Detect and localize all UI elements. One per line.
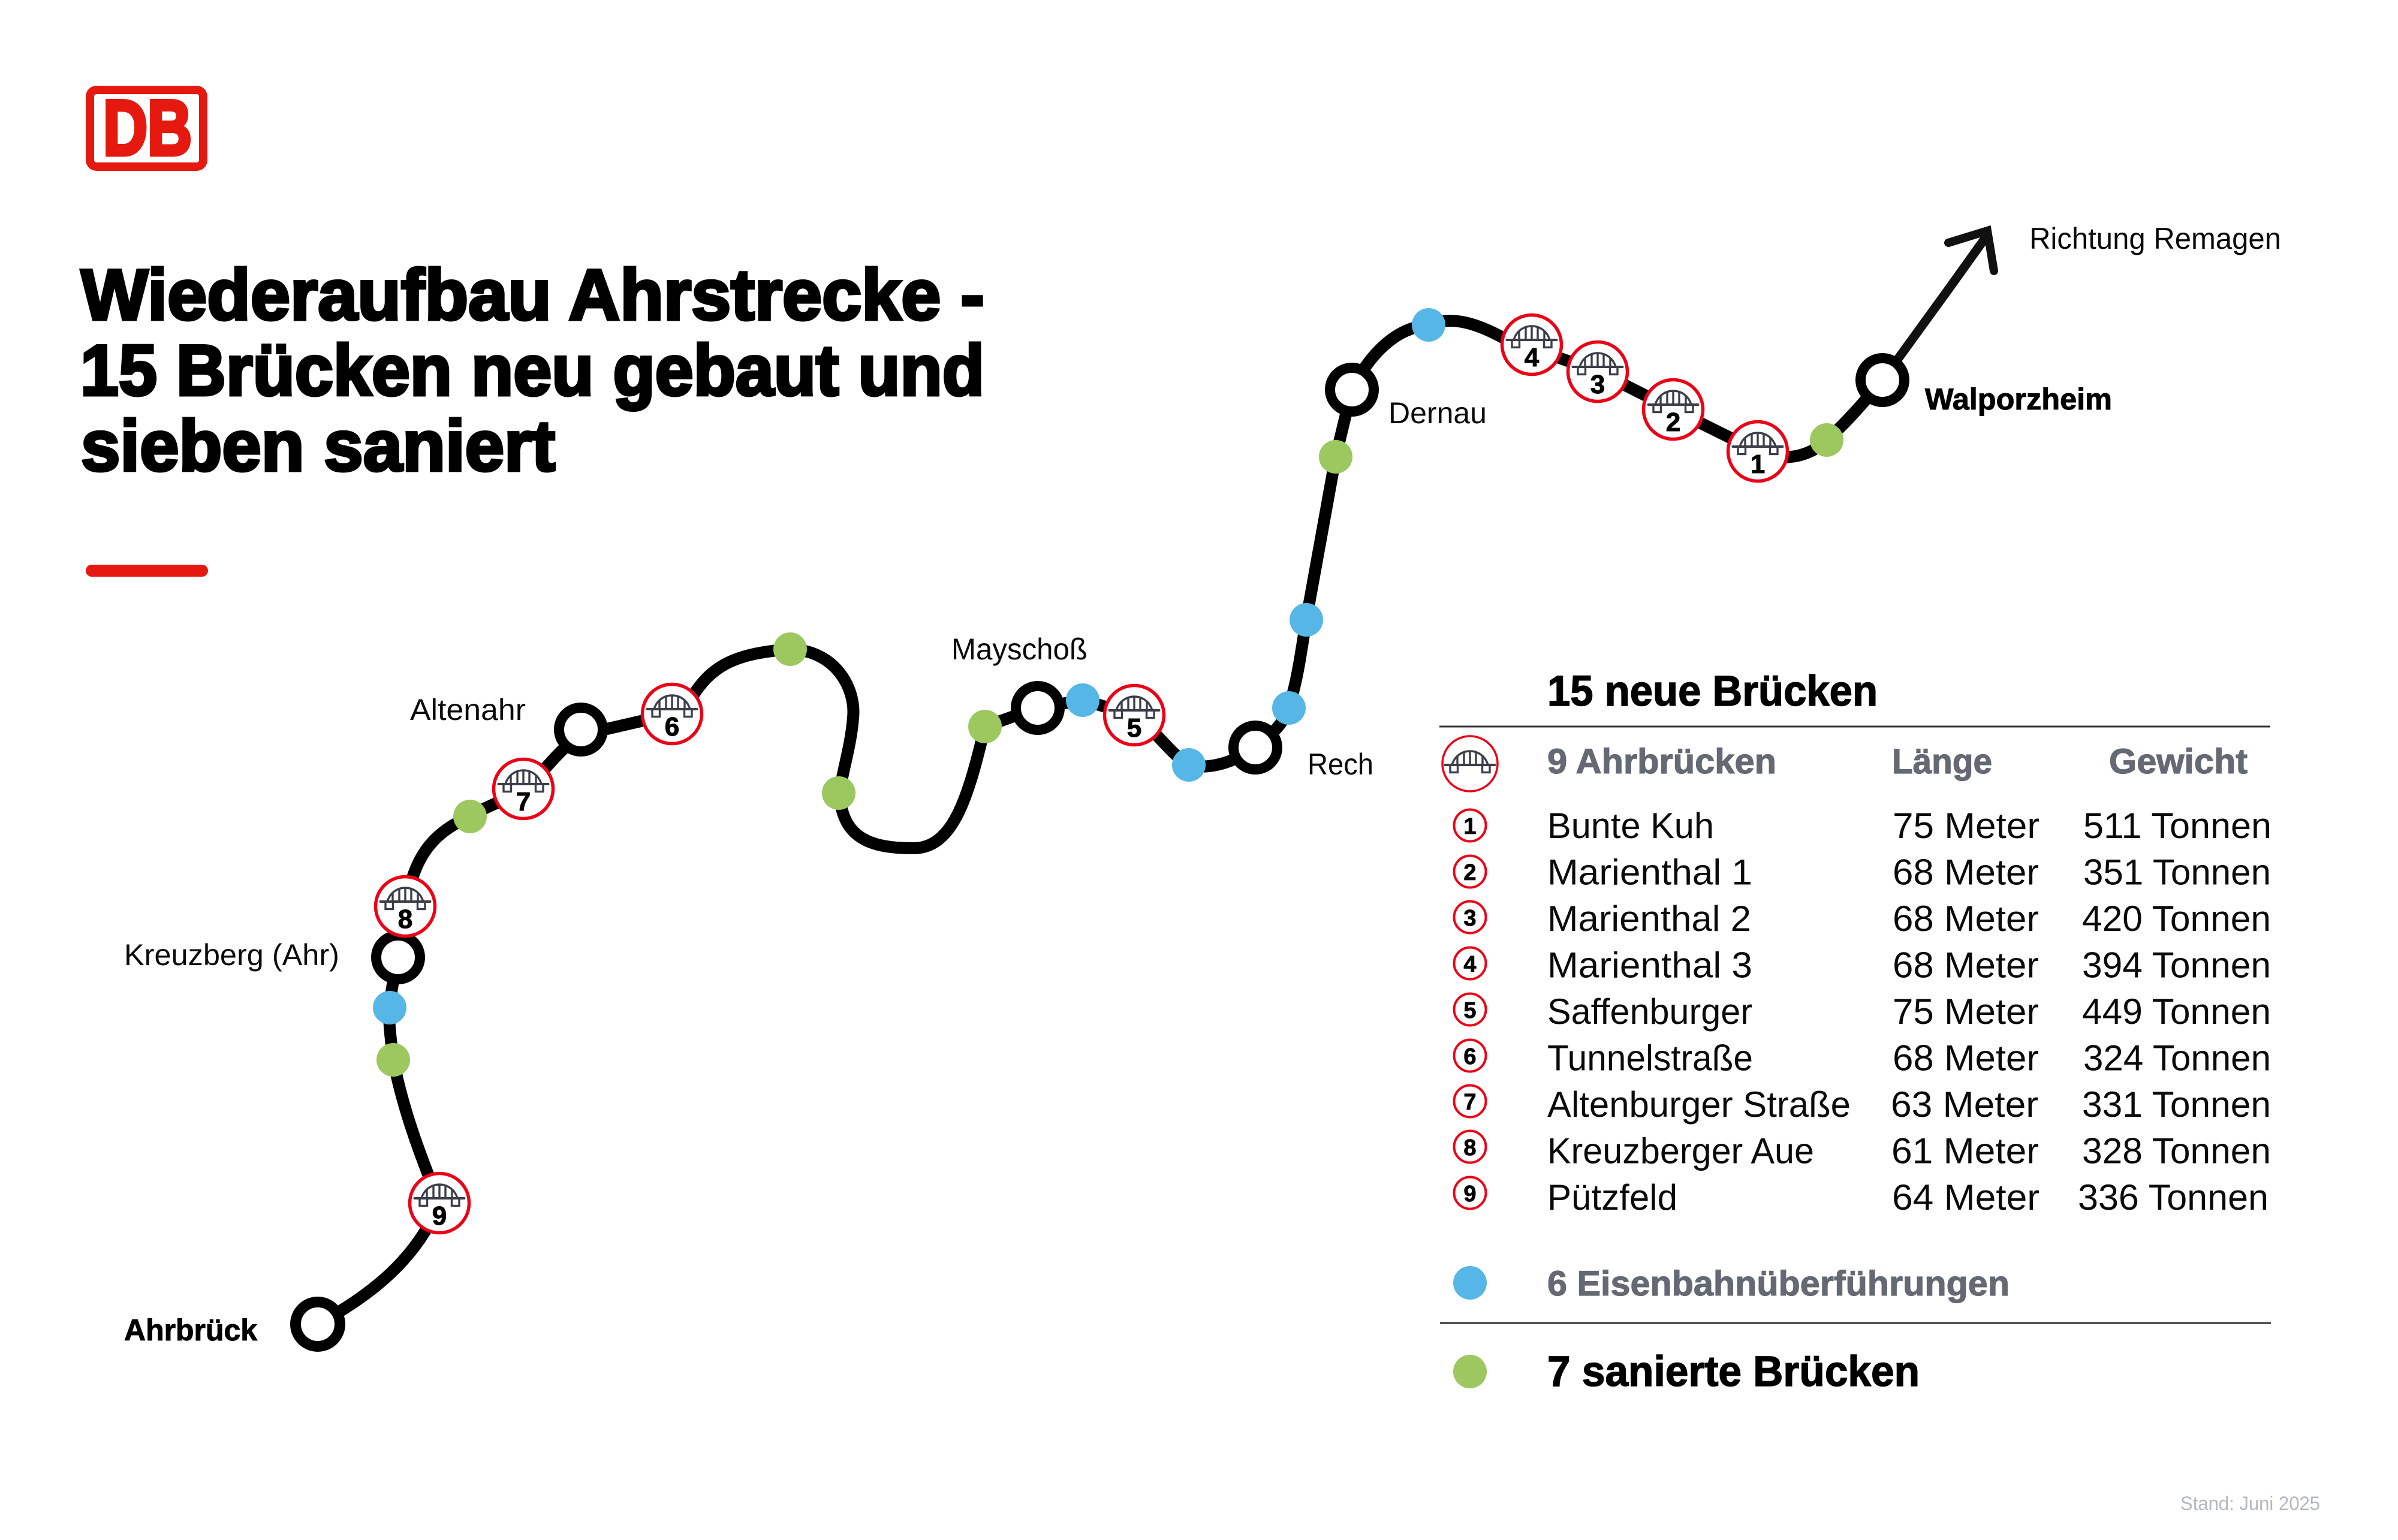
route map — [124, 222, 2281, 1347]
row 2: 2 — [1463, 860, 1477, 885]
arrow: Richtung Remagen — [1882, 231, 1994, 380]
row 5: 75 Meter — [1893, 991, 2039, 1032]
row 2 — [1454, 852, 2271, 892]
row 2: Marienthal 1 — [1547, 852, 1752, 892]
bridge marker 1 — [1728, 422, 1788, 481]
bridge marker 3: 3 — [1590, 370, 1605, 399]
label: Altenahr: Altenahr — [410, 693, 526, 727]
bridge marker 8 — [375, 876, 435, 936]
row 1: 1 — [1463, 814, 1477, 839]
row 7: 63 Meter — [1891, 1084, 2038, 1125]
bridge marker 2 — [1644, 380, 1703, 439]
row 6: 324 Tonnen — [2083, 1038, 2271, 1078]
bridge marker 5: 5 — [1127, 713, 1141, 743]
railway track line — [318, 321, 1882, 1324]
row 7 — [1454, 1084, 2271, 1125]
bridge marker 4 — [1502, 315, 1561, 374]
legend table — [1439, 668, 2272, 1396]
row 8 — [1454, 1131, 2271, 1171]
icon: DB logo: DB — [103, 84, 192, 171]
row 1: Bunte Kuh — [1547, 806, 1714, 846]
row 2: 68 Meter — [1893, 852, 2039, 892]
row 9: 336 Tonnen — [2078, 1177, 2269, 1217]
bridge marker 7 — [494, 759, 553, 819]
legend text: 7 sanierte Brücken: 7 sanierte Brücken — [1547, 1348, 1920, 1396]
station: Mayschoß — [1016, 686, 1060, 730]
bridge marker 4: 4 — [1525, 343, 1540, 372]
label: Ahrbrück: Ahrbrück — [124, 1313, 257, 1347]
row 6 — [1454, 1038, 2271, 1078]
bridge marker 5 — [1104, 686, 1164, 745]
bridge marker 9: 9 — [432, 1201, 447, 1231]
bridge marker 1: 1 — [1751, 450, 1765, 479]
row 9: Pützfeld — [1547, 1177, 1677, 1217]
bridge marker 8: 8 — [398, 905, 412, 934]
row 2: 351 Tonnen — [2083, 852, 2271, 892]
row 4: 394 Tonnen — [2082, 945, 2271, 986]
bridge marker 6: 6 — [665, 712, 679, 742]
bridge marker 9 — [410, 1174, 469, 1232]
bridge marker 3 — [1568, 342, 1627, 402]
railway overpass dots — [373, 308, 1445, 1024]
bridge marker 2: 2 — [1666, 408, 1680, 437]
row 6: Tunnelstraße — [1547, 1038, 1753, 1078]
station: Ahrbrück — [296, 1302, 340, 1346]
station: Kreuzberg — [376, 935, 420, 980]
label: Mayschoß: Mayschoß — [951, 632, 1087, 666]
title — [80, 255, 984, 486]
legend text: 6 Eisenbahnüberführungen: 6 Eisenbahnüberführungen — [1547, 1264, 2010, 1303]
title: Wiederaufbau Ahrstrecke - — [81, 255, 984, 335]
heading: 15 neue Brücken: 15 neue Brücken — [1547, 668, 1878, 715]
row 9 — [1454, 1177, 2269, 1217]
row 7: 331 Tonnen — [2082, 1084, 2271, 1125]
title: sieben saniert — [81, 406, 555, 486]
row 7: 7 — [1463, 1090, 1477, 1115]
label: Dernau: Dernau — [1388, 396, 1487, 430]
renovated bridge dots — [376, 423, 1843, 1077]
station: Altenahr — [559, 707, 603, 752]
row 3 — [1454, 899, 2271, 939]
red accent bar — [86, 565, 208, 577]
row 3: 420 Tonnen — [2082, 899, 2271, 939]
row 9: 64 Meter — [1892, 1177, 2039, 1217]
station: Rech — [1234, 725, 1277, 770]
column heading: Gewicht: Gewicht — [2109, 742, 2248, 781]
column heading: Länge: Länge — [1892, 742, 1992, 781]
row 8: Kreuzberger Aue — [1547, 1131, 1814, 1171]
row 8: 8 — [1463, 1135, 1477, 1161]
label: Richtung Remagen: Richtung Remagen — [2029, 222, 2281, 255]
row 4: 4 — [1463, 952, 1477, 977]
row 8: 328 Tonnen — [2082, 1131, 2271, 1171]
title: 15 Brücken neu gebaut und — [80, 330, 984, 411]
station: Dernau — [1330, 368, 1374, 411]
row 6: 6 — [1463, 1044, 1477, 1069]
row 1: 75 Meter — [1893, 806, 2039, 846]
row 5: 5 — [1463, 998, 1477, 1023]
row 9: 9 — [1463, 1182, 1477, 1207]
row 5: 449 Tonnen — [2082, 991, 2271, 1032]
row 3: 68 Meter — [1893, 899, 2039, 939]
bridge marker 7: 7 — [516, 787, 531, 816]
bridge marker 6 — [643, 685, 701, 743]
row 3: Marienthal 2 — [1547, 899, 1751, 939]
row 6: 68 Meter — [1893, 1038, 2039, 1078]
legend icon: bridge — [1442, 736, 1498, 791]
row 5: Saffenburger — [1547, 991, 1752, 1032]
label: Rech: Rech — [1308, 748, 1373, 781]
row 8: 61 Meter — [1891, 1131, 2039, 1171]
label: Kreuzberg (Ahr): Kreuzberg (Ahr) — [124, 938, 339, 972]
row 1 — [1454, 806, 2272, 846]
legend: green renovated dot — [1453, 1355, 1487, 1388]
row 4: 68 Meter — [1893, 945, 2039, 986]
station: Walporzheim — [1861, 358, 1904, 402]
row 4: Marienthal 3 — [1547, 945, 1752, 986]
column heading: 9 Ahrbrücken: 9 Ahrbrücken — [1547, 742, 1776, 781]
row 4 — [1454, 945, 2271, 986]
row 1: 511 Tonnen — [2083, 806, 2272, 846]
row 7: Altenburger Straße — [1547, 1084, 1851, 1125]
label: Walporzheim: Walporzheim — [1925, 382, 2112, 416]
footnote: date: Stand: Juni 2025 — [2180, 1493, 2320, 1514]
row 3: 3 — [1463, 906, 1477, 931]
legend: blue overpass dot — [1453, 1266, 1487, 1300]
row 5 — [1454, 991, 2271, 1032]
